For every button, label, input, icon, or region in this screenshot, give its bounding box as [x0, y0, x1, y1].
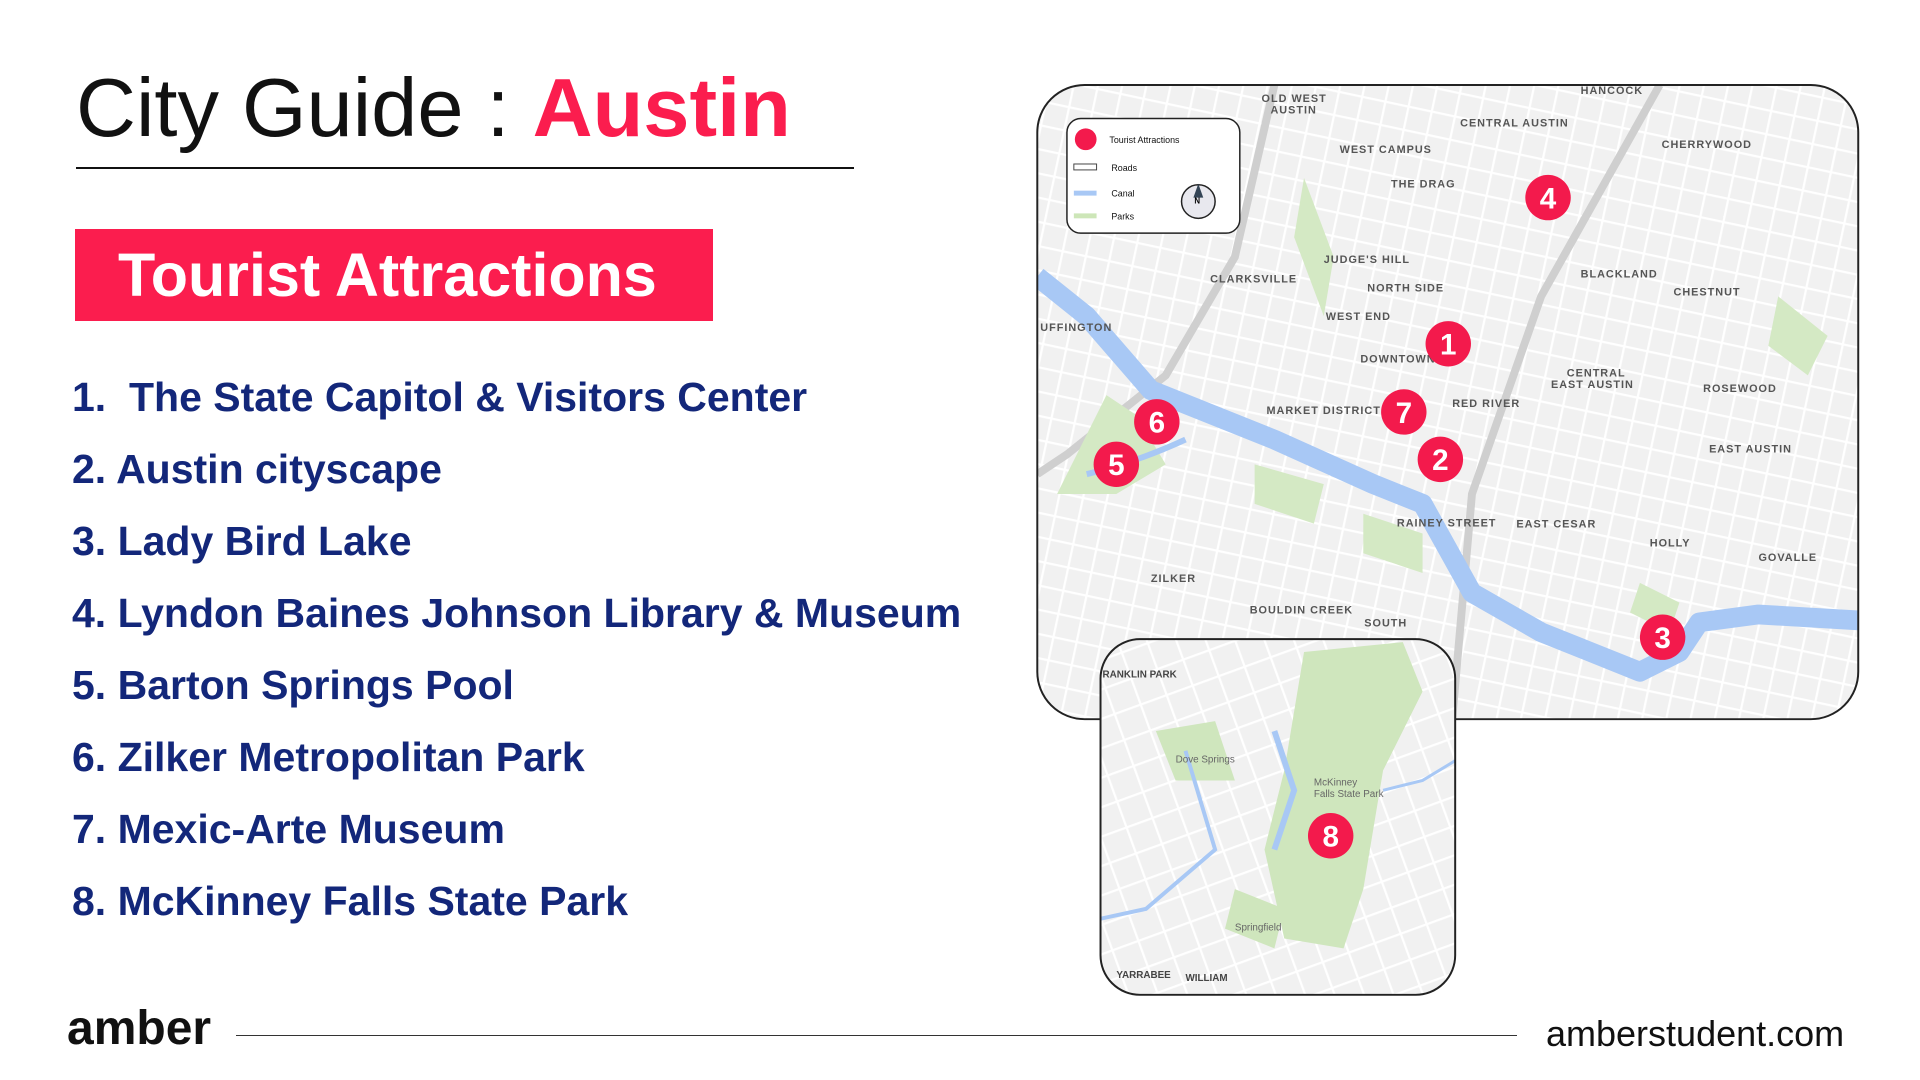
list of attractions	[72, 374, 961, 924]
list of attractions: 6. Zilker Metropolitan Park	[72, 734, 585, 780]
section heading	[75, 229, 713, 321]
section heading: Tourist Attractions	[118, 241, 657, 309]
inset map: WILLIAM	[1185, 973, 1228, 984]
main map: CLARKSVILLE	[1210, 274, 1297, 286]
main map: JUDGE'S HILL	[1324, 254, 1410, 266]
main map: WEST END	[1326, 311, 1391, 323]
markers: 5	[1108, 449, 1125, 482]
main map: CENTRAL	[1567, 367, 1626, 379]
main map: AUSTIN	[1270, 105, 1317, 117]
main map: NORTH SIDE	[1367, 282, 1444, 294]
map legend: N	[1194, 197, 1200, 206]
title: City Guide : Austin	[76, 61, 791, 154]
main map: CHESTNUT	[1674, 286, 1741, 298]
list of attractions: 3. Lady Bird Lake	[72, 518, 412, 564]
map	[1036, 84, 1860, 996]
main map: MARKET DISTRICT	[1266, 405, 1381, 417]
markers: 8	[1322, 821, 1339, 854]
inset map: Falls State Park	[1314, 789, 1384, 800]
list of attractions: 8. McKinney Falls State Park	[72, 878, 628, 924]
markers: 2	[1432, 444, 1449, 477]
map legend: Roads	[1111, 163, 1138, 173]
main map: GOVALLE	[1758, 552, 1817, 564]
footer url: amberstudent.com	[1546, 1013, 1844, 1054]
inset map: Dove Springs	[1176, 755, 1235, 766]
main map: EAST CESAR	[1516, 519, 1596, 531]
list of attractions: 2. Austin cityscape	[72, 446, 442, 492]
map legend: Parks	[1111, 211, 1135, 221]
list of attractions: 7. Mexic-Arte Museum	[72, 806, 505, 852]
inset map: Springfield	[1235, 923, 1281, 934]
inset map: RANKLIN PARK	[1102, 670, 1178, 681]
main map: HANCOCK	[1581, 85, 1643, 97]
main map: OLD WEST	[1262, 93, 1327, 105]
main map: RAINEY STREET	[1397, 518, 1496, 530]
map legend: Tourist Attractions	[1109, 135, 1180, 145]
list of attractions: 4. Lyndon Baines Johnson Library & Museum	[72, 590, 961, 636]
main map: CENTRAL AUSTIN	[1460, 117, 1569, 129]
main map: EAST AUSTIN	[1709, 443, 1792, 455]
markers: 7	[1396, 397, 1412, 430]
map legend	[1067, 119, 1240, 233]
main map: ROSEWOOD	[1703, 383, 1777, 395]
main map: BOULDIN CREEK	[1250, 604, 1353, 616]
markers	[1094, 175, 1685, 858]
list of attractions: 5. Barton Springs Pool	[72, 662, 514, 708]
markers: 6	[1149, 407, 1165, 440]
main map: HOLLY	[1650, 537, 1691, 549]
markers: 3	[1654, 622, 1671, 655]
main map: SOUTH	[1364, 617, 1407, 629]
main map: WEST CAMPUS	[1340, 144, 1432, 156]
main map: BLACKLAND	[1581, 269, 1658, 281]
main map: DOWNTOWN	[1360, 354, 1436, 366]
footer logo: amber	[67, 1002, 211, 1055]
inset map: McKinney	[1314, 777, 1357, 788]
markers: 1	[1440, 329, 1457, 362]
main map: CHERRYWOOD	[1662, 139, 1752, 151]
main map: EAST AUSTIN	[1551, 379, 1634, 391]
main map	[1037, 85, 1858, 719]
inset map	[1101, 639, 1455, 995]
inset map: YARRABEE	[1116, 970, 1171, 981]
map legend: Canal	[1111, 189, 1135, 199]
markers: 4	[1540, 182, 1557, 215]
main map: ZILKER	[1151, 573, 1196, 585]
main map: UFFINGTON	[1040, 322, 1112, 334]
list of attractions: 1. The State Capitol & Visitors Center	[72, 374, 807, 420]
main map: RED RIVER	[1452, 398, 1520, 410]
main map: THE DRAG	[1391, 179, 1456, 191]
